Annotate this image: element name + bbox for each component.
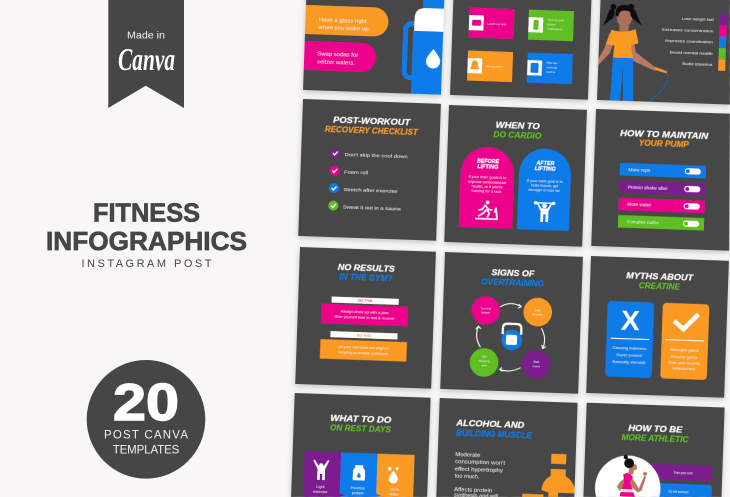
card: myths: Causing baldness: [612, 346, 647, 351]
cycle diagram: fatigue: [481, 310, 491, 315]
heading: ON REST DAYS: [330, 423, 392, 434]
pink pill tip: Swap sodas for: [317, 51, 358, 59]
heading: CREATINE: [639, 281, 681, 291]
column: drink water: [376, 454, 415, 497]
checklist: Don't skip the cool down: [345, 152, 408, 160]
toggle: protein shake after: Protein shake after: [628, 184, 668, 191]
cycle diagram: Lack: [535, 308, 542, 312]
arch: after lifting: If your main goal is to: [527, 179, 563, 184]
text block: Affects protein: [454, 487, 492, 494]
heading: [330, 414, 392, 434]
arch: before lifting: improve cardiovascular: [468, 180, 507, 185]
text block: consumption won't: [455, 459, 506, 467]
card: morning routine: morning: [546, 65, 557, 70]
arch: before lifting: LIFTING: [477, 164, 499, 171]
illustration: athlete in white circle: [595, 454, 662, 497]
benefits legend: Lose weight fast: [682, 16, 715, 22]
circle badge: 20 post canva templates: [87, 360, 205, 479]
benefits legend: Build stamina: [682, 61, 713, 67]
panel: what to do on rest days: [291, 393, 431, 497]
text block: [454, 452, 506, 497]
panel: how to be more athletic: [583, 403, 725, 497]
tip bars: Train your core: [674, 471, 693, 475]
card: myths: Super powers: [616, 353, 642, 358]
circle badge: 20 post canva templates: POST CANVA: [104, 430, 188, 442]
cycle diagram: [469, 295, 553, 379]
benefits legend: Boost mental health: [670, 49, 713, 56]
heading: [620, 129, 709, 150]
card: facts: Strength gains: [670, 348, 699, 353]
card: phone notifications: phone: [547, 22, 556, 27]
main heading: [46, 198, 247, 270]
cycle diagram: well: [481, 363, 487, 368]
arch: before lifting: BEFORE: [477, 159, 500, 165]
orange pill tip: [300, 5, 389, 37]
arch: before lifting: If your main goals is to: [468, 175, 507, 180]
tip bars: [643, 463, 713, 497]
column: light exercise: [303, 451, 341, 497]
ribbon badge: Made in Canva: Made in: [127, 30, 165, 42]
checklist: Stretch after exercise: [343, 187, 398, 195]
column: prioritise protein: [340, 452, 378, 497]
checklist: [328, 148, 408, 213]
heading: MORE ATHLETIC: [621, 433, 689, 444]
circle badge: 20 post canva templates: TEMPLATES: [113, 444, 180, 456]
arch: before lifting: health, or if you're: [472, 184, 503, 190]
tip bars: Do hiit workout: [668, 490, 688, 494]
card: morning routine: routine: [546, 70, 556, 74]
heading: WHEN TO: [496, 121, 541, 131]
heading: HOW TO BE: [628, 423, 683, 434]
panel: alcohol and building muscle: [436, 398, 578, 497]
arch: before lifting: [459, 146, 515, 229]
heading: MYTHS ABOUT: [626, 271, 695, 283]
cycle diagram: mood: [532, 364, 540, 368]
panel: jump rope benefits: [596, 0, 730, 105]
icon: orange bottles: [522, 453, 576, 497]
cycle diagram: sleeping: [478, 359, 490, 363]
card: facts: researched: [672, 366, 695, 371]
card: facts: Muscle gains: [671, 355, 698, 360]
text block: effect hypertrophy: [455, 466, 503, 474]
orange pill tip: Have a glass right: [319, 17, 367, 25]
heading: IN THE GYM?: [339, 272, 393, 283]
pink pill tip: [299, 41, 377, 72]
toggle: more reps: [620, 163, 706, 178]
column: light exercise: Light: [316, 485, 326, 489]
icon: weight lifter: [533, 201, 555, 222]
main heading: INFOGRAPHICS: [46, 226, 247, 256]
heading: [481, 268, 545, 288]
card: morning routine: Plan the: [547, 61, 558, 65]
heading: HOW TO MAINTAIN: [620, 129, 709, 141]
heading: RECOVERY CHECKLIST: [325, 125, 419, 137]
orange pill tip: when you wake up.: [317, 25, 371, 33]
card: lunch out less: [469, 8, 515, 39]
circle badge: 20 post canva templates: 20: [113, 374, 179, 432]
heading: NO RESULTS: [338, 263, 396, 274]
heading: ALCOHOL AND: [455, 419, 525, 430]
cycle diagram: Bad: [533, 360, 539, 364]
heading: POST-WORKOUT: [333, 116, 412, 127]
toggle: more water: [618, 198, 705, 213]
cycle diagram: appetite: [532, 312, 543, 316]
panel: habits grid: [450, 0, 593, 100]
heading: [626, 271, 695, 292]
panel: signs of overtraining: [440, 252, 583, 394]
block: do that: DO THIS: [357, 333, 372, 338]
card: set an alarm: [467, 51, 513, 82]
ribbon badge: Made in Canva: [108, 0, 184, 108]
heading: [621, 423, 689, 444]
arch: after lifting: stronger or lose fat.: [528, 188, 561, 193]
toggle: complex carbs: Complex carbs: [627, 219, 660, 225]
arch: after lifting: [517, 148, 572, 231]
benefits legend: Increases concentration: [661, 26, 714, 33]
cycle diagram: You feel: [480, 306, 492, 311]
benefits legend: Improves coordination: [665, 38, 713, 45]
block: do this: [321, 296, 408, 326]
column: drink water: water: [390, 492, 400, 497]
illustration: girl with jump rope: [596, 3, 670, 102]
toggle: more water: More water: [627, 202, 652, 208]
arch: after lifting: LIFTING: [535, 166, 556, 173]
icon: treadmill runner: [475, 200, 498, 219]
heading: [325, 115, 419, 137]
card: myths: X: [620, 305, 641, 336]
icon: kettlebell: [501, 324, 523, 351]
panel: how to maintain your pump: [591, 109, 730, 251]
heading: YOUR PUMP: [639, 139, 690, 149]
column: light exercise: exercise: [313, 490, 327, 494]
toggle: protein shake after: [619, 180, 705, 196]
heading: DO CARDIO: [493, 130, 542, 141]
text block: too much.: [454, 474, 480, 480]
column: drink water: Drink: [390, 487, 399, 492]
heading: [337, 263, 396, 283]
panel: post-workout recovery checklist: [298, 99, 441, 241]
block: do that: Relying on muscle confusion: [339, 350, 388, 356]
card: myths: Basically steroids: [612, 360, 646, 365]
block: do this: Always show up with a plan: [341, 309, 389, 315]
card: myths: [605, 301, 654, 378]
panel: water tips: [298, 0, 450, 96]
main heading: INSTAGRAM POST: [82, 258, 212, 270]
heading: OVERTRAINING: [481, 277, 544, 288]
card: phone notifications: Turn up your: [548, 18, 564, 22]
card: set an alarm: Set an alarm: [486, 64, 503, 69]
checklist: Sweat it out in a sauna: [343, 204, 401, 212]
card: lunch out less: Lunch out less: [487, 22, 507, 26]
text block: Moderate: [455, 452, 480, 459]
card: phone notifications: [528, 10, 574, 41]
arch: after lifting: AFTER: [535, 161, 555, 167]
card: facts: [660, 303, 709, 380]
card: phone notifications: notifications: [547, 27, 563, 31]
arch: after lifting: build muscle, get: [531, 184, 558, 188]
panel: no results in the gym: [295, 247, 436, 389]
toggle: complex carbs: [618, 215, 704, 231]
checklist: Foam roll: [344, 169, 368, 176]
benefits legend: [660, 12, 727, 71]
heading: [493, 121, 543, 141]
main heading: FITNESS: [93, 198, 200, 228]
card: morning routine: [527, 53, 573, 84]
column: prioritise protein: protein: [352, 491, 364, 495]
card: facts: Safe and heavily: [668, 361, 700, 366]
pink pill tip: seltzer waters.: [317, 59, 356, 67]
cycle diagram: Not: [482, 354, 487, 359]
column: prioritise protein: Prioritize: [350, 486, 365, 491]
block: do that: All your exercises are aligned: [338, 345, 389, 351]
block: do this: Give yourself time to rest & recover: [335, 315, 396, 321]
block: do this: DO THIS: [358, 299, 373, 303]
panel: myths about creatine: [586, 256, 729, 398]
toggle: more reps: More reps: [628, 167, 651, 173]
heading: BUILDING MUSCLE: [456, 429, 533, 440]
heading: WHAT TO DO: [330, 414, 392, 425]
icon: water bottle: [403, 0, 449, 96]
arch: before lifting: training for a race.: [471, 189, 503, 194]
block: do that: [320, 331, 407, 362]
heading: [455, 419, 533, 440]
ribbon badge: Made in Canva: Canva: [118, 41, 175, 77]
heading: SIGNS OF: [491, 268, 536, 279]
panel: when to do cardio: [444, 105, 587, 247]
cycle arrows: [474, 302, 547, 373]
